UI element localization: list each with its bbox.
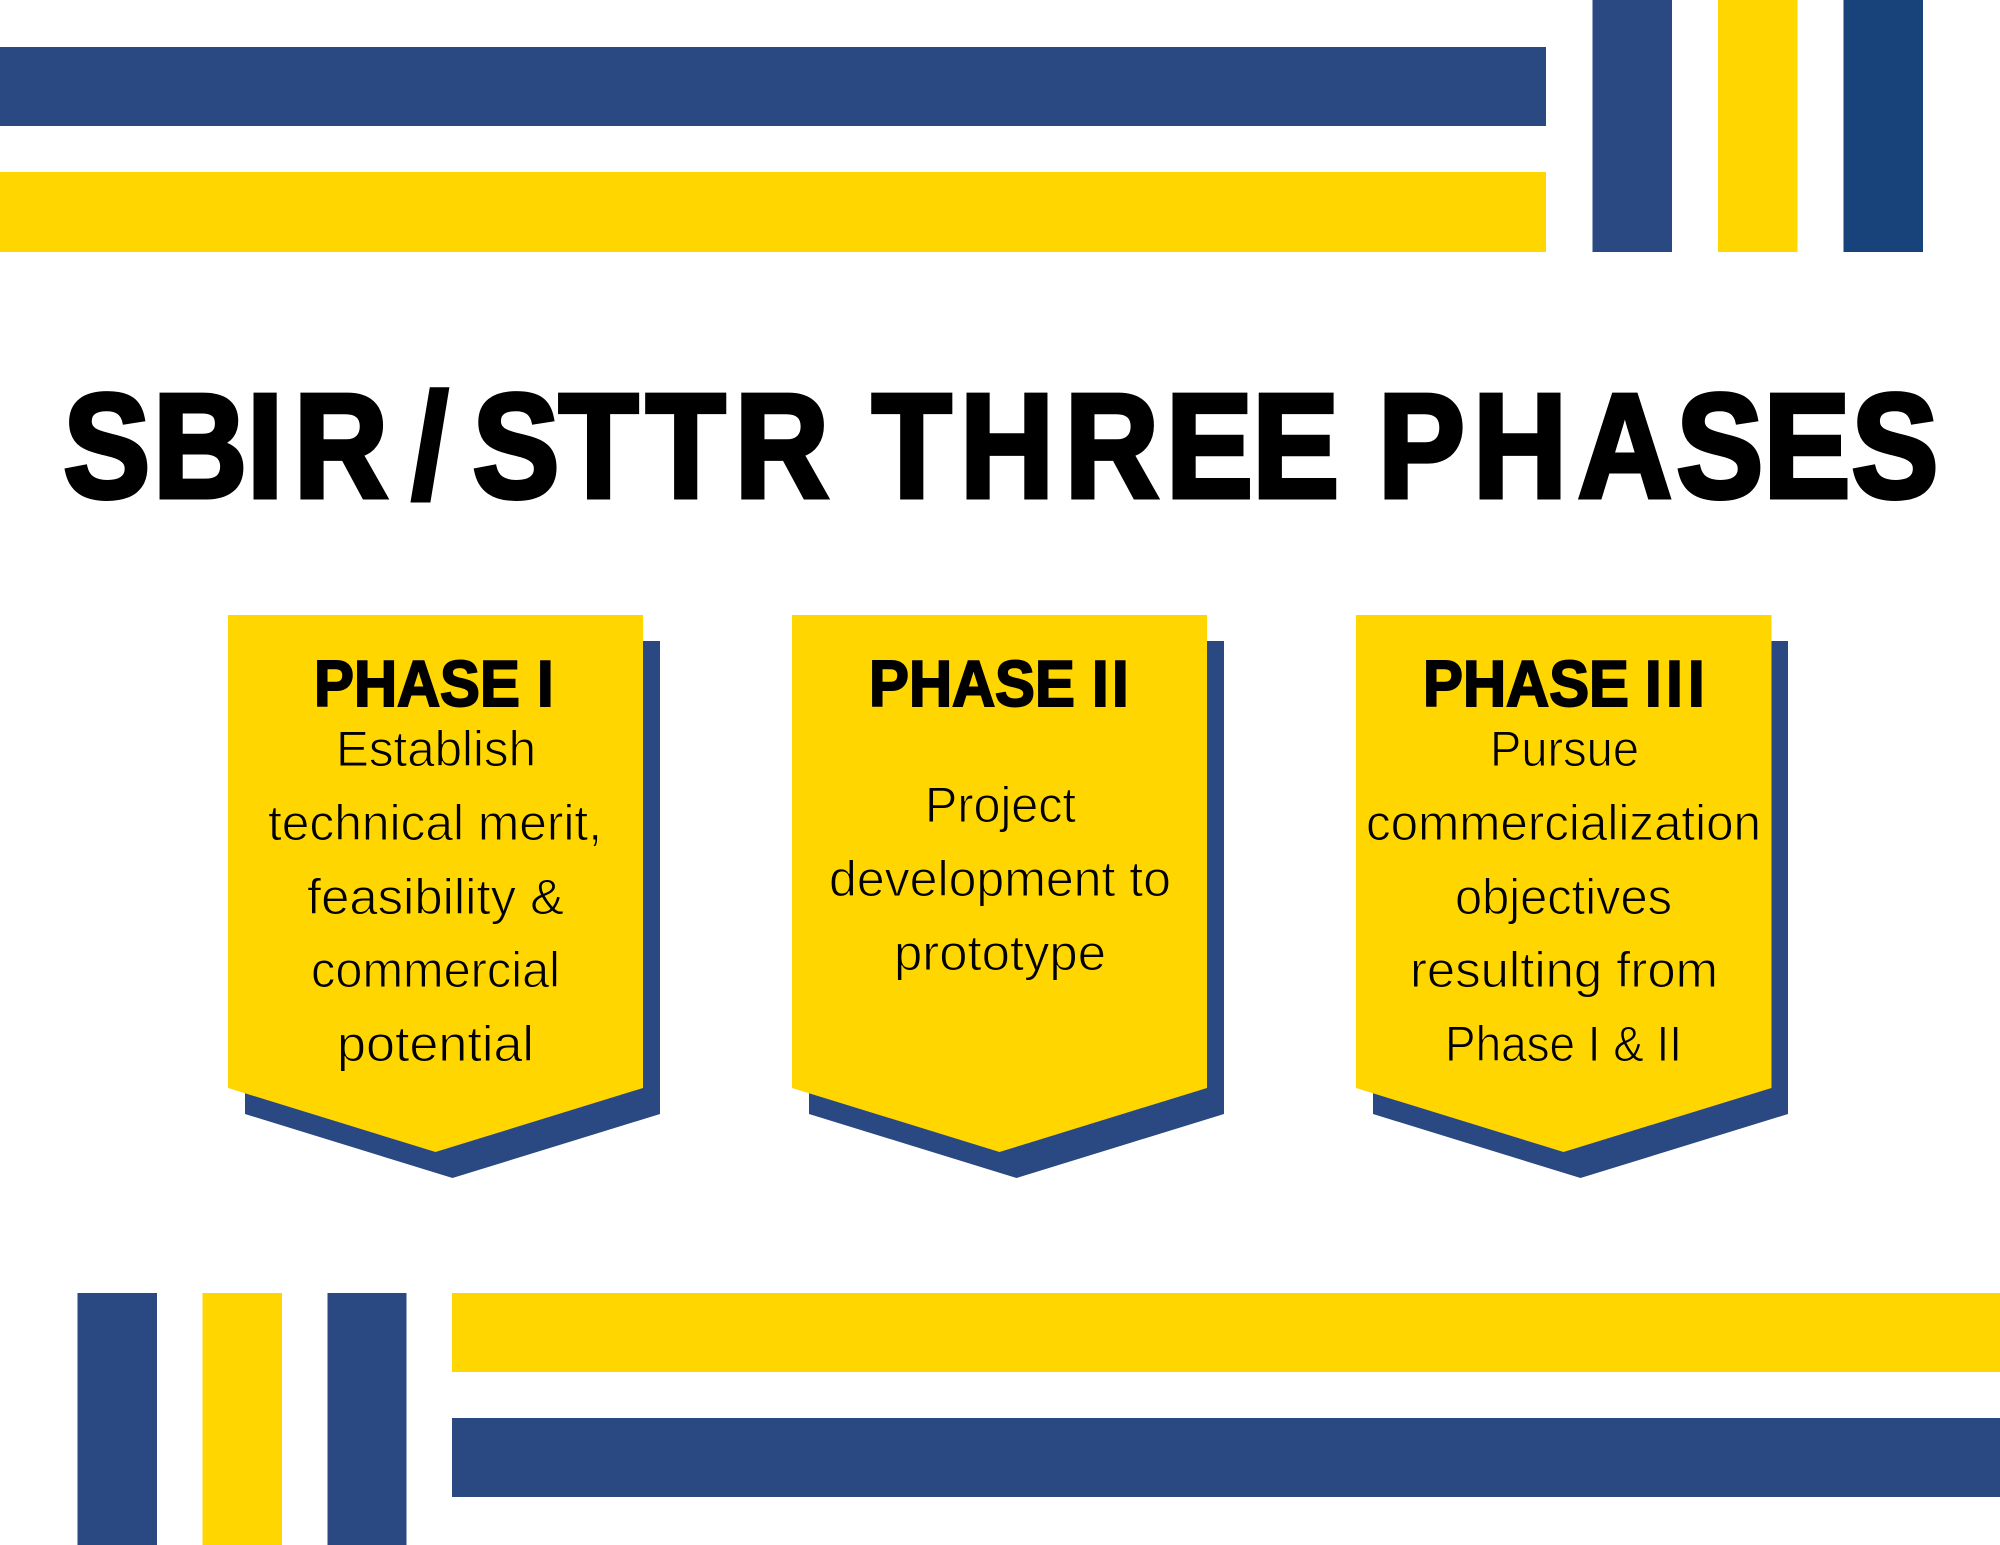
panel: phase II xyxy=(792,615,1224,1178)
description: phase III: Pursue xyxy=(1490,721,1639,777)
title xyxy=(63,363,1938,529)
card shadow: phase I xyxy=(245,641,660,1178)
heading: phase I: PHASE I xyxy=(314,648,554,721)
heading: phase III: PHASE III xyxy=(1423,648,1705,721)
description: phase I: technical merit, xyxy=(268,795,602,851)
panel: phase III xyxy=(1356,615,1788,1178)
description: phase I: commercial xyxy=(311,942,560,998)
title: SBIR/STTR xyxy=(63,363,829,529)
description: phase I: Establish xyxy=(336,721,536,777)
card: phase I xyxy=(228,615,643,1152)
description: phase II: prototype xyxy=(894,925,1106,981)
panel: phase I xyxy=(228,615,660,1178)
bottom decorative bars xyxy=(78,1293,2000,1545)
description: phase III xyxy=(1366,721,1761,1072)
description: phase I xyxy=(268,721,602,1072)
title: PHASES xyxy=(1378,363,1938,529)
description: phase III: resulting from xyxy=(1410,942,1718,998)
heading: phase II: PHASE II xyxy=(869,648,1129,721)
description: phase III: objectives xyxy=(1455,869,1672,925)
description: phase I: potential xyxy=(337,1016,534,1072)
card shadow: phase II xyxy=(809,641,1224,1178)
card shadow: phase III xyxy=(1373,641,1788,1178)
description: phase II: development to xyxy=(829,851,1171,907)
title: THREE xyxy=(872,363,1339,529)
description: phase II: Project xyxy=(925,777,1076,833)
description: phase II xyxy=(829,777,1171,981)
description: phase III: commercialization xyxy=(1366,795,1761,851)
top decorative bars xyxy=(0,0,1923,252)
card: phase II xyxy=(792,615,1207,1152)
card: phase III xyxy=(1356,615,1772,1152)
description: phase I: feasibility & xyxy=(307,869,564,925)
description: phase III: Phase I & II xyxy=(1445,1016,1682,1072)
